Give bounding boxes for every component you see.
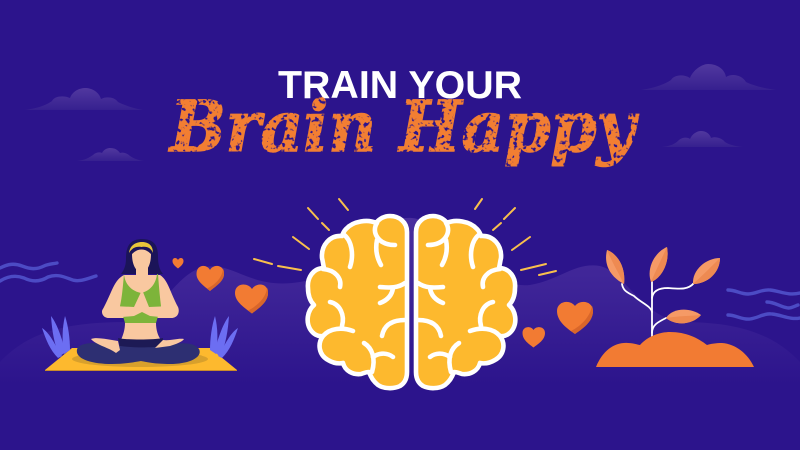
title: Train Your: TRAIN YOUR [278, 64, 522, 107]
shorts [118, 338, 163, 348]
rays around brain [254, 199, 556, 275]
right waves [728, 290, 800, 319]
headband [129, 242, 153, 253]
waist [121, 323, 161, 340]
left hemisphere [308, 216, 407, 388]
left waves [0, 263, 96, 281]
title: Brain Happy: Brain Happy [168, 85, 639, 168]
yoga mat [45, 348, 237, 371]
cloud: lower right [662, 131, 743, 147]
hair fringe [129, 246, 154, 258]
cloud: upper left [25, 88, 143, 110]
mound [596, 332, 754, 367]
feet [91, 338, 184, 353]
right hemisphere [416, 216, 515, 388]
face [132, 250, 151, 272]
sprout [596, 247, 754, 367]
brain [308, 216, 515, 388]
cloud: lower left [77, 148, 144, 161]
cloud: upper right [641, 64, 776, 90]
hair [121, 239, 163, 274]
forearms and hands [102, 292, 178, 318]
skin: neck, shoulders, arms [102, 266, 179, 318]
legs [77, 343, 200, 364]
right plant [210, 316, 238, 358]
leaves [606, 250, 624, 284]
hearts [172, 258, 593, 348]
green top [120, 274, 161, 323]
left plant [42, 316, 70, 358]
meditating woman [77, 239, 200, 364]
background hills [0, 218, 800, 385]
stems [622, 282, 694, 337]
